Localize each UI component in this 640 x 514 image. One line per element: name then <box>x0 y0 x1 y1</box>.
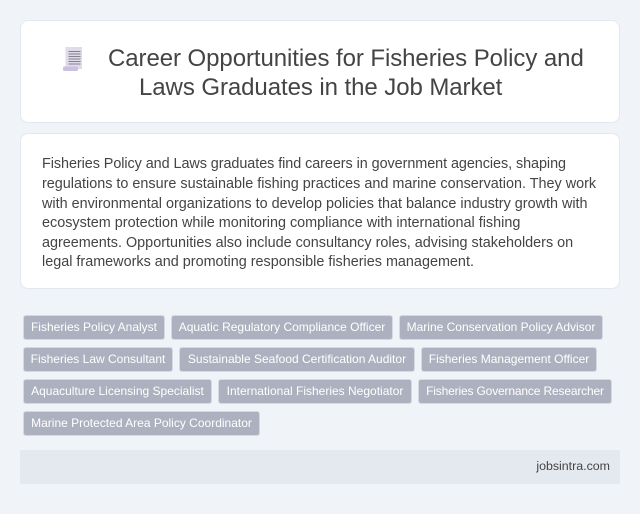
tag <box>421 347 597 372</box>
tag: Fisheries Management Officer <box>429 352 589 366</box>
description text: legal frameworks and promoting responsible fisheries management. <box>42 254 474 270</box>
tag: Fisheries Policy Analyst <box>31 320 157 334</box>
tag <box>23 379 212 404</box>
tag <box>23 347 173 372</box>
header panel <box>20 20 620 123</box>
tag: Fisheries Governance Researcher <box>426 384 604 398</box>
tag: Sustainable Seafood Certification Auditor <box>188 352 406 366</box>
tag: International Fisheries Negotiator <box>227 384 403 398</box>
title: Laws Graduates in the Job Market <box>139 74 502 101</box>
tag <box>179 347 415 372</box>
description text: agreements. Opportunities also include consultancy roles, advising stakeholders on <box>42 235 573 251</box>
description panel <box>20 133 620 289</box>
description text: ecosystem protection while monitoring compliance with international fishing <box>42 215 520 231</box>
tag: Marine Protected Area Policy Coordinator <box>31 416 252 430</box>
tag <box>23 315 165 340</box>
tag <box>418 379 612 404</box>
tag <box>218 379 412 404</box>
tag: Aquaculture Licensing Specialist <box>31 384 204 398</box>
tag: Aquatic Regulatory Compliance Officer <box>179 320 385 334</box>
icon: document scroll <box>63 47 82 71</box>
tag: Marine Conservation Policy Advisor <box>407 320 595 334</box>
description text: Fisheries Policy and Laws graduates find careers in government agencies, shaping <box>42 156 566 172</box>
title <box>108 45 584 101</box>
tag: Fisheries Law Consultant <box>31 352 165 366</box>
footer bar <box>20 450 620 484</box>
career tags <box>23 315 612 436</box>
tag <box>399 315 603 340</box>
description text <box>42 156 596 270</box>
footer site name: jobsintra.com <box>536 459 610 473</box>
description text: regulations to ensure sustainable fishing practices and marine conservation. They work <box>42 176 596 192</box>
title: Career Opportunities for Fisheries Policy and <box>108 45 584 72</box>
tag <box>171 315 393 340</box>
tag <box>23 411 260 436</box>
description text: with environmental organizations to develop policies that balance industry growth with <box>42 196 588 212</box>
